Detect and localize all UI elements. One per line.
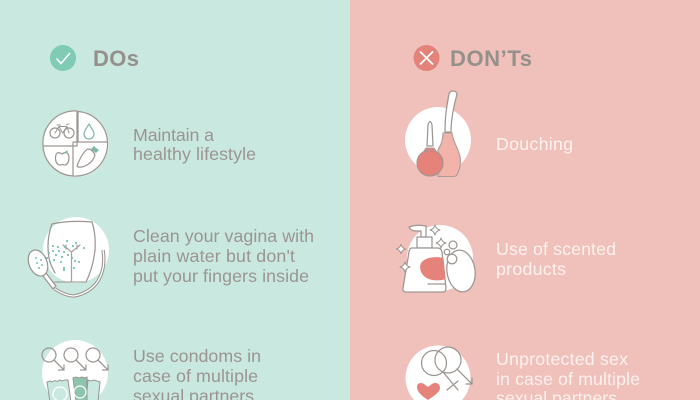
small bulb <box>417 122 443 176</box>
text: maintain a healthy lifestyle: Maintain a <box>133 125 214 145</box>
text: maintain a healthy lifestyle <box>133 125 256 164</box>
icon: shower and vagina <box>25 217 109 296</box>
icon: healthy lifestyle plate <box>42 111 108 177</box>
panel: dos background <box>0 0 350 400</box>
heading: DONTs: DON’Ts <box>450 46 532 71</box>
bubbles <box>444 241 457 264</box>
icon: condoms and male symbols <box>42 340 108 400</box>
icon: unprotected sex symbols <box>406 346 472 400</box>
text: clean your vagina: put your fingers inside <box>133 266 309 286</box>
heart <box>417 383 440 400</box>
text: unprotected sex <box>496 349 640 400</box>
apple <box>56 150 69 165</box>
hose <box>55 250 104 296</box>
text: use condoms: Use condoms in <box>133 346 261 366</box>
icon: x mark <box>414 45 440 71</box>
carrot <box>77 146 99 167</box>
icon: scented soap products <box>396 225 478 294</box>
text: douching: Douching <box>496 134 573 154</box>
condom packets <box>47 377 100 400</box>
heading: DOs: DOs <box>93 46 139 71</box>
text: clean your vagina: plain water but don't <box>133 246 295 266</box>
text: unprotected sex: Unprotected sex <box>496 349 628 369</box>
text: use condoms: case of multiple <box>133 366 258 386</box>
soap bottle <box>403 225 446 292</box>
panel: donts background <box>350 0 700 400</box>
text: clean your vagina: Clean your vagina with <box>133 226 314 246</box>
shower head <box>25 247 56 289</box>
text: clean your vagina <box>133 226 314 286</box>
sparkles <box>396 225 446 272</box>
icon: douching bulbs <box>405 91 471 176</box>
text: unprotected sex: in case of multiple <box>496 369 640 389</box>
bicycle <box>50 124 74 138</box>
large bulb <box>438 91 460 176</box>
text: maintain a healthy lifestyle: healthy lifestyle <box>133 144 256 164</box>
water drop <box>84 124 94 139</box>
water droplets <box>46 240 85 271</box>
text: use of scented products <box>496 239 616 279</box>
text: use of scented products: products <box>496 259 566 279</box>
icon: check mark <box>50 45 76 71</box>
text: use condoms <box>133 346 261 400</box>
text: use of scented products: Use of scented <box>496 239 616 259</box>
soap bar <box>444 248 478 294</box>
